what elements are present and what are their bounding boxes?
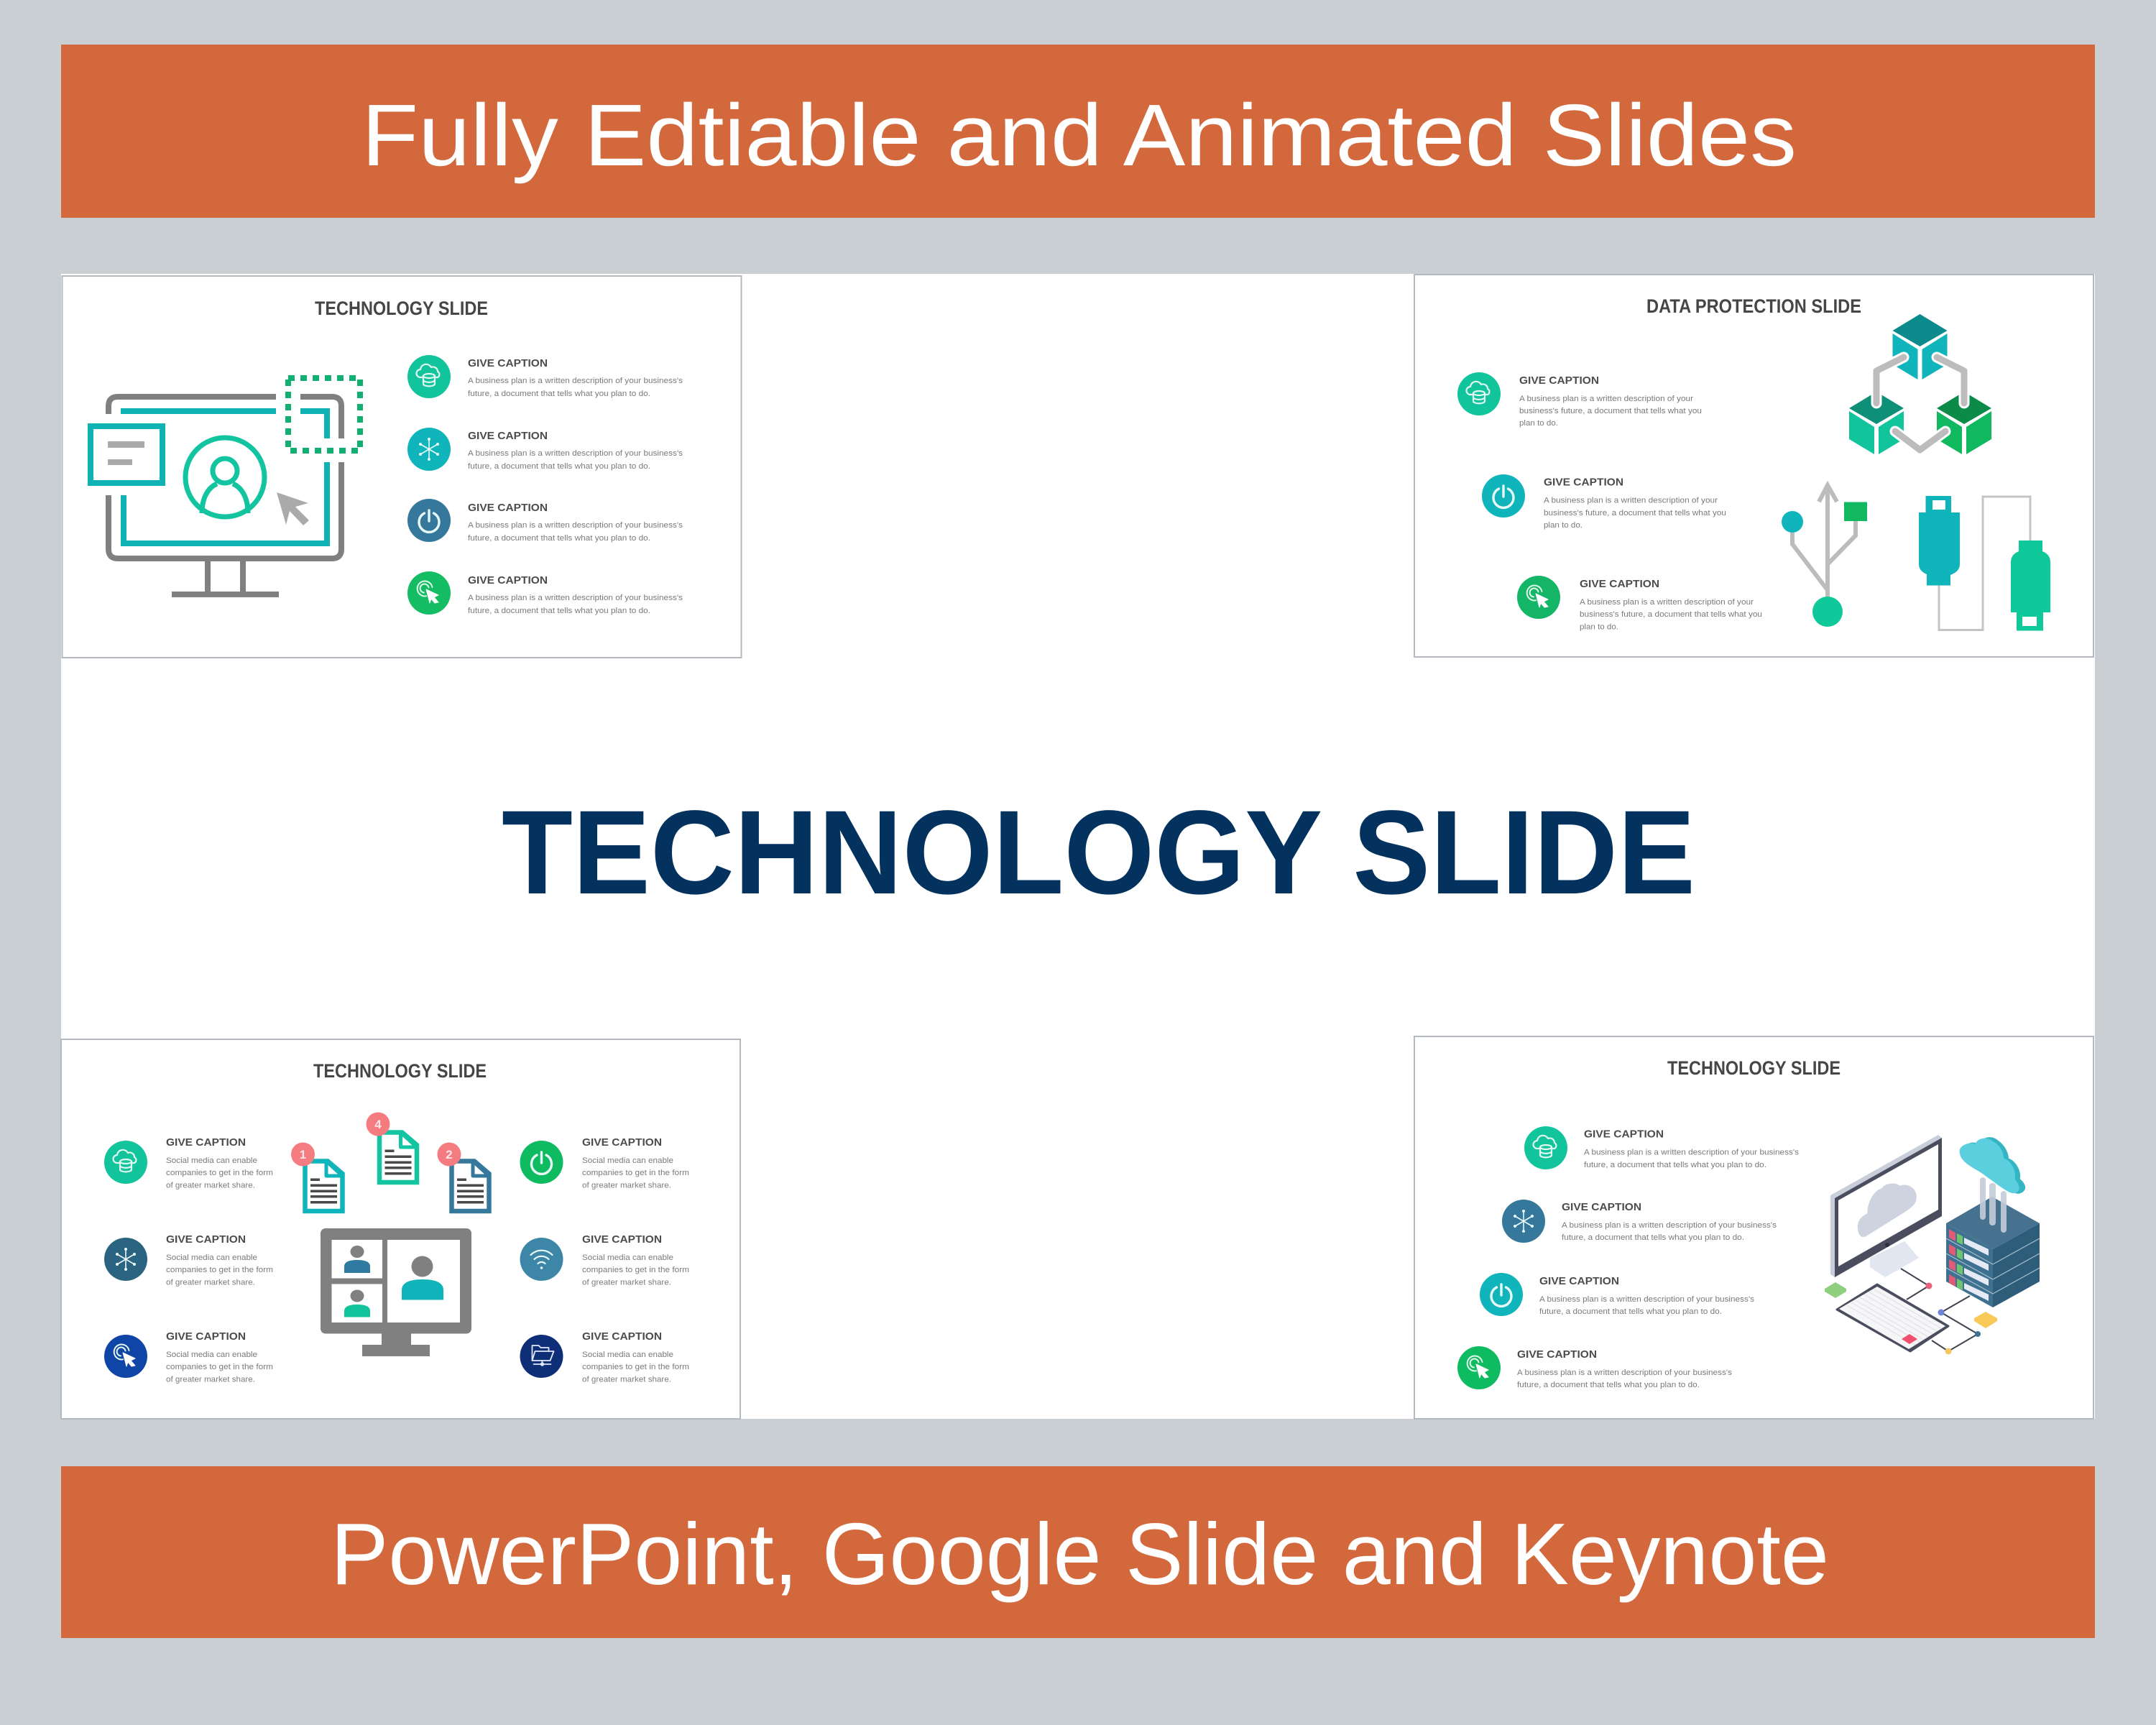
right column row 2: of greater market share. [582,1278,671,1287]
row 1: plan to do. [1519,419,1558,428]
row 1: future, a document that tells what you plan to do. [1584,1161,1766,1169]
row 4 [1457,1346,1733,1389]
monitor [1830,1135,1942,1277]
row 2: A business plan is a written description of your [1544,496,1718,505]
row 2: GIVE CAPTION [468,430,548,442]
banner heading: PowerPoint, Google Slide and Keynote [331,1505,1829,1603]
row 3: GIVE CAPTION [1580,578,1659,590]
row 2: A business plan is a written description of your business's [1562,1221,1777,1230]
right column row 3: Social media can enable [582,1351,673,1359]
row 3: GIVE CAPTION [468,502,548,514]
icon: document 1: 1 [300,1148,306,1162]
row 2: plan to do. [1544,521,1583,530]
row 4: future, a document that tells what you plan to do. [1517,1381,1700,1389]
left column row 1: companies to get in the form [166,1169,273,1177]
left column row 3: GIVE CAPTION [166,1330,246,1343]
row 3: future, a document that tells what you plan to do. [1539,1307,1722,1316]
row 1: business's future, a document that tells what you [1519,407,1702,415]
icon: usb cable with two plugs [1919,496,2050,631]
left column row 2: companies to get in the form [166,1266,273,1274]
central white area [61,274,2095,1419]
row 1 [1457,372,1702,428]
left column row 2: GIVE CAPTION [166,1233,246,1246]
row 1: GIVE CAPTION [468,357,548,369]
row 1: A business plan is a written description of your business's [1584,1149,1800,1157]
panel: data protection slide, top right [1414,275,2093,657]
icon: monitor with user profile [91,378,360,597]
right column row 3: of greater market share. [582,1376,671,1384]
row 2 [407,428,683,471]
left column row 3: of greater market share. [166,1376,255,1384]
row 3: business's future, a document that tells what you [1580,610,1762,619]
left column row 1: Social media can enable [166,1156,257,1165]
left column row 2: Social media can enable [166,1254,257,1262]
icon: monitor with video call participants [321,1228,471,1356]
right column row 3: GIVE CAPTION [582,1330,662,1343]
row 3: A business plan is a written description of your business's [468,521,683,530]
bottom banner [61,1466,2095,1638]
cloud [1960,1137,2025,1194]
green tile [1825,1282,1846,1298]
icon: document 2: 2 [446,1148,453,1162]
row 3 [1480,1273,1755,1316]
row 4 [407,571,683,615]
right column row 1: Social media can enable [582,1156,673,1165]
row 2: A business plan is a written description of your business's [468,449,683,458]
row 1: GIVE CAPTION [1584,1128,1664,1140]
icon: document 4: 4 [374,1118,382,1131]
row 2: business's future, a document that tells what you [1544,509,1726,518]
panel heading: TECHNOLOGY SLIDE [1667,1057,1841,1079]
panel: technology slide video call, bottom left [61,1039,740,1419]
row 4: future, a document that tells what you plan to do. [468,607,650,615]
icon: usb symbol [1782,485,1867,627]
row 3: A business plan is a written description of your business's [1539,1295,1755,1304]
row 2: GIVE CAPTION [1562,1201,1641,1213]
yellow tile [1974,1312,1997,1328]
connecting wires [1901,1269,1978,1351]
left column row 2: of greater market share. [166,1278,255,1287]
left column row 2 [104,1233,273,1287]
row 4: A business plan is a written description of your business's [468,594,683,602]
row 1: future, a document that tells what you plan to do. [468,390,650,398]
left column row 1 [104,1136,273,1190]
row 1 [1524,1126,1800,1169]
row 3: GIVE CAPTION [1539,1275,1619,1287]
left column row 3 [104,1330,273,1384]
row 3 [407,499,683,543]
panel heading: DATA PROTECTION SLIDE [1646,295,1861,317]
left column row 1: GIVE CAPTION [166,1136,246,1149]
right column row 2: GIVE CAPTION [582,1233,662,1246]
right column row 3: companies to get in the form [582,1363,689,1371]
row 2: GIVE CAPTION [1544,476,1623,489]
right column row 2 [520,1233,689,1287]
row 2: future, a document that tells what you plan to do. [468,462,650,471]
panel: technology slide cloud server, bottom right [1414,1036,2093,1419]
panel heading: TECHNOLOGY SLIDE [315,298,488,319]
row 4: GIVE CAPTION [1517,1348,1597,1361]
right column row 2: companies to get in the form [582,1266,689,1274]
row 1: A business plan is a written description of your business's [468,377,683,385]
right column row 1: companies to get in the form [582,1169,689,1177]
right column row 1: of greater market share. [582,1182,671,1190]
row 3 [1517,576,1762,631]
illustration: isometric monitor, phone, server and cloud [1825,1135,2040,1354]
right column row 1 [520,1136,689,1190]
row 2 [1502,1200,1777,1243]
row 3: plan to do. [1580,622,1618,631]
icon: document 1 [291,1143,342,1211]
right column row 2: Social media can enable [582,1254,673,1262]
icon: document 4 [367,1113,417,1182]
panel: technology slide monitor, top left [62,276,742,658]
icon: connected cubes [1849,314,1991,454]
top banner [61,45,2095,218]
row 2: future, a document that tells what you plan to do. [1562,1233,1744,1242]
row 4: A business plan is a written description of your business's [1517,1368,1733,1377]
phone [1837,1284,1948,1351]
right column row 1: GIVE CAPTION [582,1136,662,1149]
row 1 [407,355,683,398]
left column row 3: companies to get in the form [166,1363,273,1371]
right column row 3 [520,1330,689,1384]
icon: document 2 [437,1143,489,1211]
left column row 1: of greater market share. [166,1182,255,1190]
panel heading: TECHNOLOGY SLIDE [313,1060,487,1082]
row 4: GIVE CAPTION [468,574,548,586]
row 3: future, a document that tells what you plan to do. [468,534,650,543]
left column row 3: Social media can enable [166,1351,257,1359]
row 1: GIVE CAPTION [1519,374,1599,387]
connector dots [1926,1282,1981,1354]
banner heading: Fully Edtiable and Animated Slides [361,86,1797,184]
server stack [1946,1177,2040,1307]
row 3: A business plan is a written description of your [1580,598,1754,607]
row 1: A business plan is a written description of your [1519,395,1693,403]
main title: TECHNOLOGY SLIDE [502,786,1695,919]
row 2 [1482,474,1726,530]
